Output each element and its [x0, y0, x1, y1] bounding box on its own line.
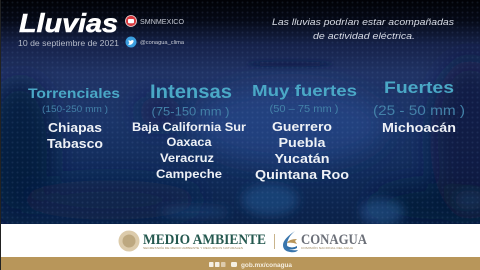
- states: Chiapas, Tabasco: Chiapas: [48, 120, 102, 135]
- heading: Fuertes: Fuertes: [384, 78, 454, 97]
- divider: [274, 234, 275, 249]
- handle: conagua_clima: @conagua_clima: [140, 40, 184, 46]
- icons: social media: [209, 262, 237, 267]
- column: Torrenciales: [28, 85, 120, 151]
- range: 50-75 mm: (50 – 75 mm ): [270, 104, 338, 115]
- icon: national emblem: [118, 230, 140, 252]
- icon: Conagua logo: [283, 231, 298, 252]
- column: Muy fuertes: [252, 83, 357, 182]
- states: Chiapas, Tabasco: Tabasco: [47, 136, 103, 151]
- heading: Torrenciales: Torrenciales: [28, 85, 120, 101]
- url: gob.mx/conagua: gob.mx/conagua: [241, 262, 292, 269]
- note: electrical activity: Las lluvias podrían estar acompañadas: [272, 17, 455, 27]
- icon: Twitter: [126, 36, 136, 48]
- states: Michoacán: Michoacán: [382, 120, 456, 135]
- note: electrical activity: [272, 17, 455, 41]
- footer band: logos: [1, 224, 480, 257]
- range: 75-150 mm: (75-150 mm ): [152, 104, 230, 118]
- column: Intensas: [132, 82, 246, 181]
- title: Lluvias: Lluvias: [19, 8, 118, 38]
- states: Baja California Sur, Oaxaca, Veracruz, Campeche: Oaxaca: [166, 135, 212, 149]
- states: Guerrero, Puebla, Yucatán, Quintana Roo: [255, 119, 349, 182]
- range: 25-50 mm: (25 - 50 mm ): [373, 102, 465, 118]
- heading: Muy fuertes: Muy fuertes: [252, 83, 357, 100]
- states: Baja California Sur, Oaxaca, Veracruz, Campeche: [132, 120, 246, 181]
- icon: YouTube: [126, 16, 136, 26]
- date: 10 de septiembre de 2021: [18, 39, 120, 48]
- states: Baja California Sur, Oaxaca, Veracruz, Campeche: Campeche: [156, 167, 222, 181]
- note: electrical activity: de actividad eléctrica.: [313, 31, 415, 41]
- logo subtitle: SECRETARÍA DE MEDIO AMBIENTE Y RECURSOS NATURALES: [143, 247, 243, 250]
- column: Fuertes: [373, 78, 465, 135]
- states: Guerrero, Puebla, Yucatán, Quintana Roo: Quintana Roo: [255, 167, 349, 182]
- states: Guerrero, Puebla, Yucatán, Quintana Roo: Yucatán: [274, 151, 330, 166]
- states: Baja California Sur, Oaxaca, Veracruz, Campeche: Baja California Sur: [132, 120, 246, 134]
- range: 150-250 mm: (150-250 mm ): [42, 104, 108, 114]
- states: Guerrero, Puebla, Yucatán, Quintana Roo: Puebla: [278, 135, 326, 150]
- states: Chiapas, Tabasco: [47, 120, 103, 151]
- logo text: Conagua: CONAGUA: [301, 232, 367, 248]
- states: Baja California Sur, Oaxaca, Veracruz, Campeche: Veracruz: [160, 151, 214, 165]
- logo text: Medio Ambiente: MEDIO AMBIENTE: [143, 232, 266, 248]
- heading: Intensas: Intensas: [150, 82, 232, 103]
- states: Guerrero, Puebla, Yucatán, Quintana Roo: Guerrero: [272, 119, 332, 134]
- footer band: gold: [1, 257, 480, 270]
- handle: SMNMEXICO: SMNMEXICO: [140, 19, 185, 26]
- logo subtitle: Conagua: COMISIÓN NACIONAL DEL AGUA: [301, 247, 353, 250]
